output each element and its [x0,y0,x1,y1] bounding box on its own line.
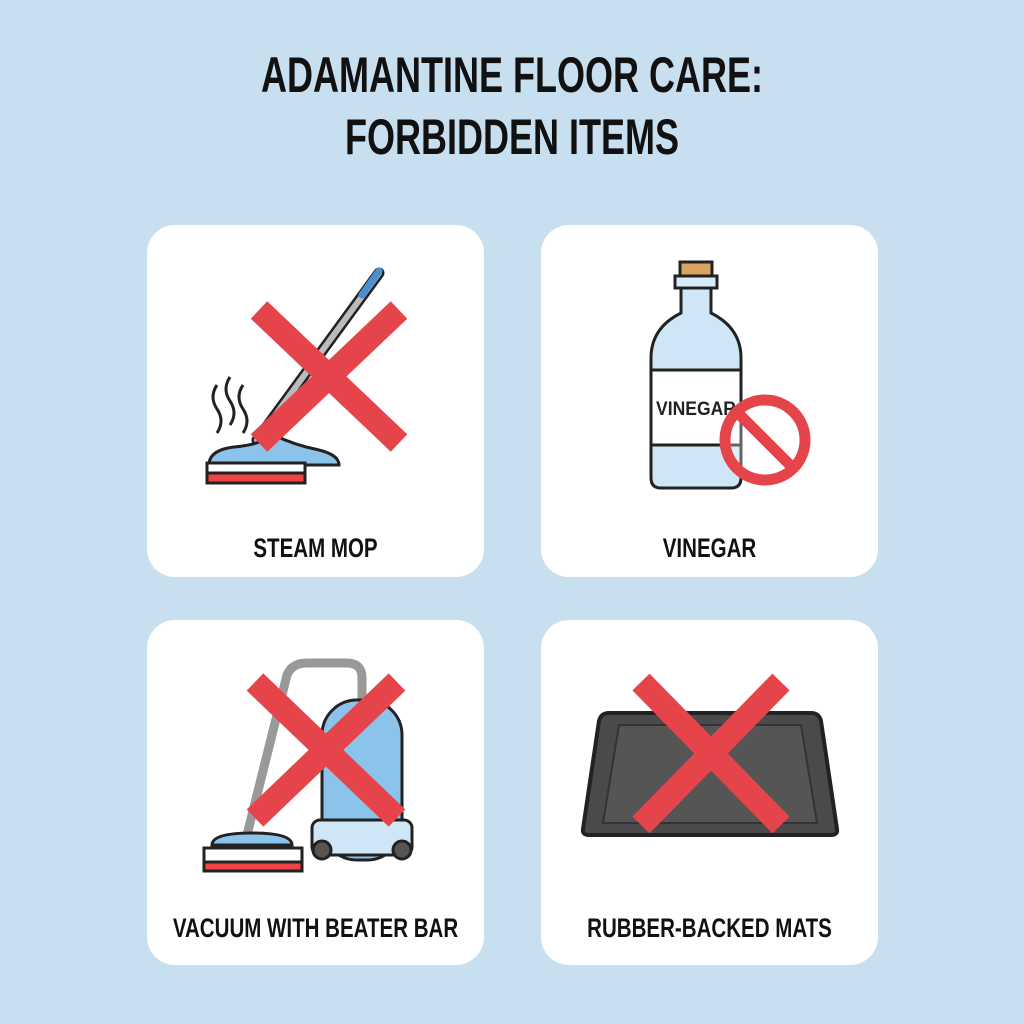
label: RUBBER-BACKED MATS [587,913,832,943]
panel: vacuum [147,620,484,965]
icon: vacuum [204,663,412,871]
icon: rubber mat [583,713,837,835]
icon: red X [641,682,781,825]
icon: red X [255,682,397,818]
panel: vinegar [541,225,878,577]
icon: red X [259,310,399,443]
label: VACUUM WITH BEATER BAR [173,913,458,943]
icon: vinegar bottle: VINEGAR [656,399,736,420]
label: STEAM MOP [253,533,378,563]
icon: vinegar bottle [651,262,741,488]
title [261,47,763,165]
title: ADAMANTINE FLOOR CARE: [261,47,763,103]
label: VINEGAR [663,533,756,563]
icon: prohibition sign [725,400,805,480]
icon: steam mop [207,271,379,483]
panel: rubber mats [541,620,878,965]
title: FORBIDDEN ITEMS [345,109,679,165]
panel: steam mop [147,225,484,577]
